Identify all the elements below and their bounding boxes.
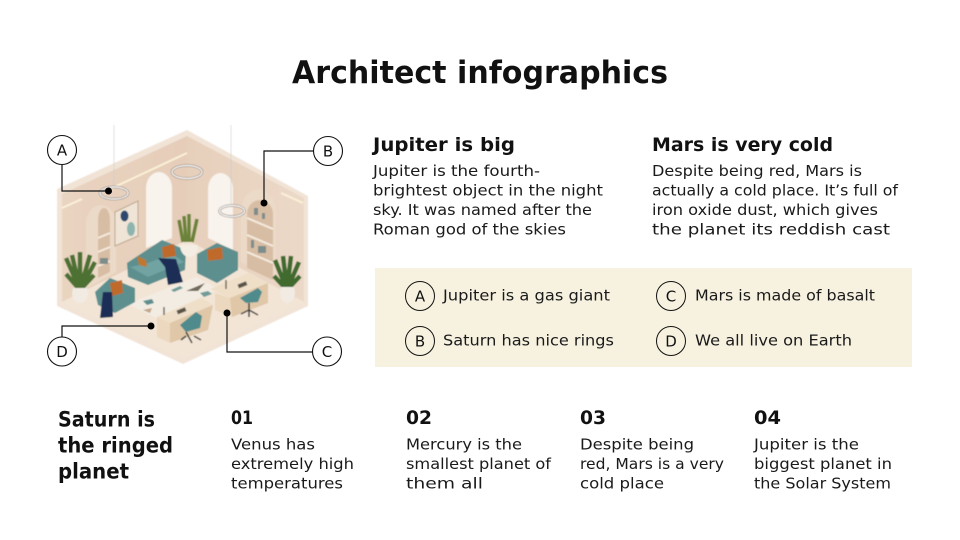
desk chairs	[180, 312, 202, 332]
text block: Jupiter is big: Jupiter is the fourth-	[372, 162, 540, 180]
text block: Mars is very cold: actually a cold place. It’s full of	[652, 182, 899, 200]
illustration: isometric office room	[57, 125, 308, 364]
armchair right	[197, 243, 238, 283]
heading: Saturn is the ringed planet: Saturn is	[58, 408, 155, 432]
wall light strips	[62, 153, 303, 208]
step 02: smallest planet of	[406, 455, 552, 473]
heading: Saturn is the ringed planet: planet	[58, 460, 129, 484]
callout B: B	[323, 142, 333, 160]
panel: legend	[375, 268, 912, 367]
legend item B	[406, 326, 614, 356]
text block: Jupiter is big: Roman god of the skies	[373, 220, 566, 238]
step 04: Jupiter is the	[753, 436, 859, 454]
text block: Mars is very cold	[652, 134, 899, 238]
step 01: temperatures	[231, 474, 343, 492]
shelves	[98, 208, 110, 278]
legend item B: Saturn has nice rings	[443, 332, 614, 350]
legend item D: We all live on Earth	[695, 332, 852, 350]
desk items	[164, 280, 226, 315]
legend item B: B	[415, 332, 425, 350]
callout A: A	[57, 142, 68, 160]
step 03: red, Mars is a very	[580, 455, 724, 473]
desks	[157, 298, 213, 323]
step 02	[406, 407, 552, 492]
legend item D: D	[665, 332, 677, 350]
heading: Saturn is the ringed planet: the ringed	[58, 434, 173, 458]
armchair left	[95, 278, 135, 313]
text block: Jupiter is big	[371, 134, 603, 238]
sofa	[127, 240, 186, 285]
step 01: Venus has	[231, 436, 315, 454]
step 04: 04	[754, 407, 781, 429]
legend item A	[406, 282, 610, 310]
rug	[128, 277, 218, 318]
legend item A: A	[415, 288, 426, 306]
plant right	[274, 256, 300, 303]
legend item C: C	[666, 288, 676, 306]
callout B	[260, 136, 342, 206]
heading: Saturn is the ringed planet	[58, 408, 173, 484]
room shell	[57, 130, 308, 364]
hanging rings	[114, 125, 231, 205]
arched windows	[146, 172, 172, 248]
callout D: D	[56, 343, 68, 361]
text block: Mars is very cold: iron oxide dust, which gives	[652, 201, 878, 219]
step 02: 02	[406, 407, 432, 429]
callout A	[48, 136, 112, 194]
text block: Mars is very cold: the planet its reddish cast	[652, 220, 890, 238]
callout D	[48, 322, 154, 366]
legend item C: Mars is made of basalt	[695, 286, 875, 304]
step 02: Mercury is the	[406, 436, 522, 454]
text block: Mars is very cold: Despite being red, Mars is	[652, 162, 862, 180]
step 02: them all	[406, 474, 483, 492]
callout C: C	[322, 343, 332, 361]
step 04: the Solar System	[754, 474, 891, 492]
text block: Jupiter is big: Jupiter is big	[371, 134, 515, 156]
plant left	[66, 252, 95, 303]
step 04	[753, 407, 892, 492]
step 03: Despite being	[580, 436, 694, 454]
text block: Jupiter is big: brightest object in the night	[373, 182, 603, 200]
step 03	[580, 407, 724, 492]
step 01: 01	[231, 407, 253, 429]
text block: Mars is very cold: Mars is very cold	[652, 134, 833, 156]
legend item C	[656, 282, 875, 310]
legend item D	[656, 326, 852, 356]
step 04: biggest planet in	[754, 455, 892, 473]
step 01	[231, 407, 354, 492]
step 03: 03	[580, 407, 606, 429]
legend item A: Jupiter is a gas giant	[442, 286, 610, 304]
callout C	[224, 310, 342, 366]
wall art	[115, 201, 138, 246]
text block: Jupiter is big: sky. It was named after the	[373, 201, 592, 219]
plant centre	[179, 214, 198, 257]
shelf pillars	[86, 205, 116, 288]
step 03: cold place	[580, 474, 664, 492]
title: Architect infographics	[292, 55, 668, 91]
step 01: extremely high	[231, 455, 354, 473]
